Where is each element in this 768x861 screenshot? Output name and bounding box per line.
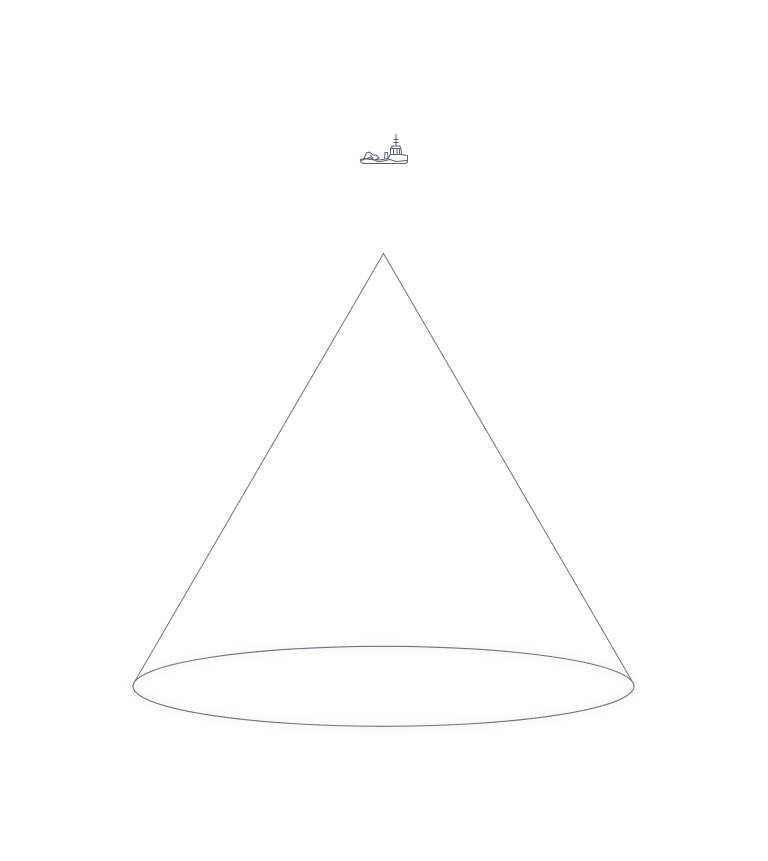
cone base shadow (134, 646, 634, 726)
icon: ship (360, 134, 408, 164)
cone sides (135, 254, 632, 681)
cone base ellipse (133, 646, 634, 726)
